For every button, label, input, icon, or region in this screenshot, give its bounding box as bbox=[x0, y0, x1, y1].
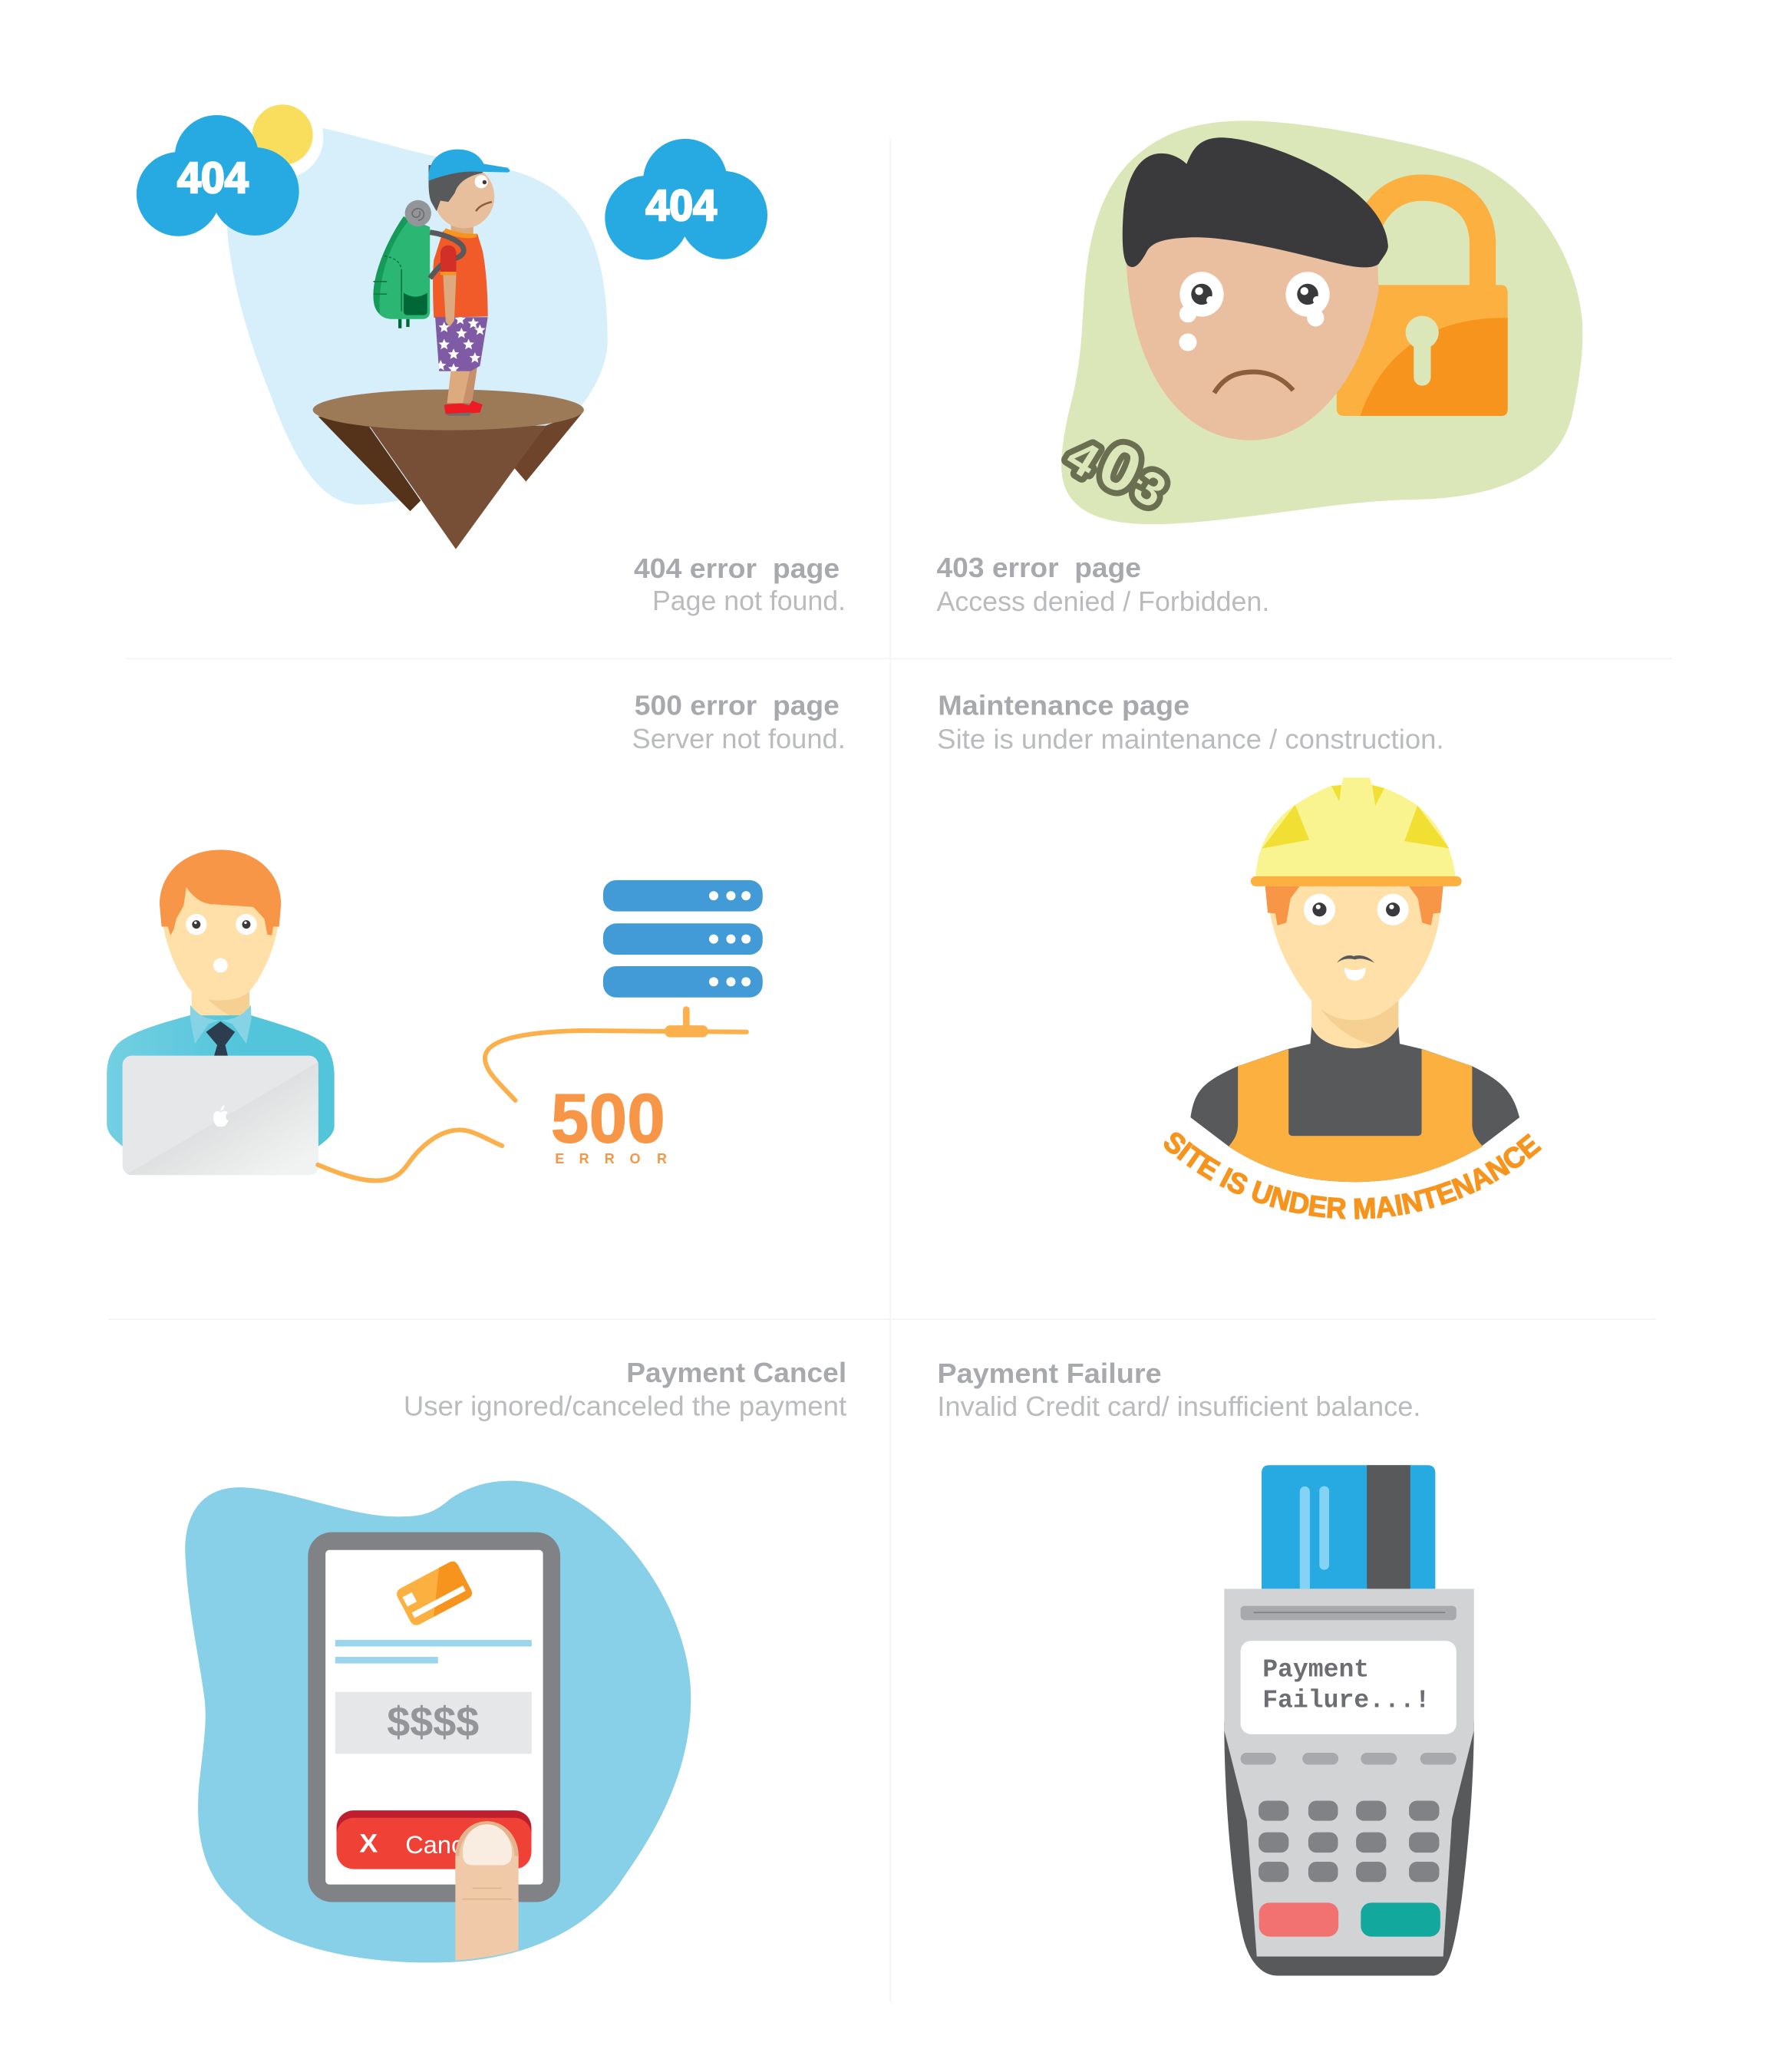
heading: 404 error page: 404 error page bbox=[634, 553, 840, 584]
icon: sun bbox=[242, 97, 323, 178]
label: 403 rotated: 3 bbox=[1124, 460, 1175, 519]
blob: blue background bbox=[185, 1480, 691, 1962]
floating island bbox=[313, 390, 584, 549]
button: cancel bbox=[337, 1810, 531, 1869]
text: Site is under maintenance: Site is under maintenance / construction. bbox=[937, 724, 1444, 755]
hard hat bbox=[1251, 777, 1462, 886]
blob: green background bbox=[1061, 120, 1582, 524]
text: terminal screen bbox=[1262, 1655, 1430, 1715]
panel: payment cancel bbox=[185, 1357, 846, 1962]
laptop bbox=[123, 1056, 318, 1175]
character: backpacker bbox=[428, 150, 510, 416]
icon: padlock bbox=[1337, 188, 1508, 416]
text: Access denied: Access denied / Forbidden. bbox=[937, 586, 1269, 617]
icon: credit card bbox=[394, 1559, 474, 1628]
heading: Maintenance page: Maintenance page bbox=[938, 689, 1189, 721]
icon: cloud left with 404: 404 bbox=[177, 153, 249, 202]
heading: Payment Failure: Payment Failure bbox=[937, 1358, 1162, 1389]
text: User ignored: User ignored/canceled the payment bbox=[404, 1391, 846, 1422]
label: 500 error: ERROR bbox=[555, 1151, 667, 1166]
panel: maintenance page bbox=[937, 689, 1542, 1219]
cable: server to error bbox=[485, 1010, 747, 1100]
phone bbox=[308, 1533, 560, 1902]
text: Page not found: Page not found. bbox=[652, 585, 846, 616]
heading: Payment Cancel: Payment Cancel bbox=[626, 1357, 846, 1388]
button: cancel: Cancel bbox=[405, 1831, 483, 1859]
icon: credit card in terminal bbox=[1262, 1465, 1435, 1589]
character: office man bbox=[107, 850, 335, 1175]
icon: cloud left with 404 bbox=[137, 115, 299, 236]
backpack bbox=[373, 200, 431, 328]
character: construction worker bbox=[1190, 777, 1519, 1182]
label: 403 rotated: 4 bbox=[1057, 429, 1108, 488]
button: cancel: X bbox=[359, 1829, 378, 1858]
panel: payment failure bbox=[937, 1358, 1474, 1975]
label: 403 rotated bbox=[1057, 427, 1175, 519]
text: dollar amount: $$$$ bbox=[387, 1698, 479, 1745]
icon: server stack bbox=[603, 880, 763, 998]
icon: cloud right with 404: 404 bbox=[645, 181, 718, 229]
heading: 500 error page: 500 error page bbox=[635, 689, 840, 721]
icon: cloud right with 404 bbox=[605, 139, 767, 260]
character: crying face bbox=[1123, 137, 1388, 440]
label: curved site is under maintenance: SITE IS UNDER MAINTENANCE bbox=[1163, 1133, 1542, 1219]
text: Invalid Credit card: Invalid Credit card/ insufficient balance. bbox=[937, 1391, 1420, 1422]
cable: laptop to error bbox=[318, 1130, 502, 1180]
text: Server not found: Server not found. bbox=[632, 723, 846, 754]
icon: finger bbox=[455, 1821, 519, 1961]
panel: 403 error page bbox=[937, 120, 1582, 617]
payment terminal bbox=[1224, 1589, 1474, 1975]
label: 403 rotated: 0 bbox=[1088, 427, 1153, 509]
panel: 500 error page bbox=[107, 689, 846, 1180]
text: terminal screen: Payment bbox=[1262, 1655, 1369, 1684]
blob: light blue background bbox=[227, 128, 608, 505]
panel: 404 error page bbox=[137, 97, 846, 616]
label: 500 error: 500 bbox=[551, 1081, 665, 1158]
heading: 403 error page: 403 error page bbox=[937, 552, 1141, 583]
text: terminal screen: Failure...! bbox=[1262, 1686, 1430, 1715]
